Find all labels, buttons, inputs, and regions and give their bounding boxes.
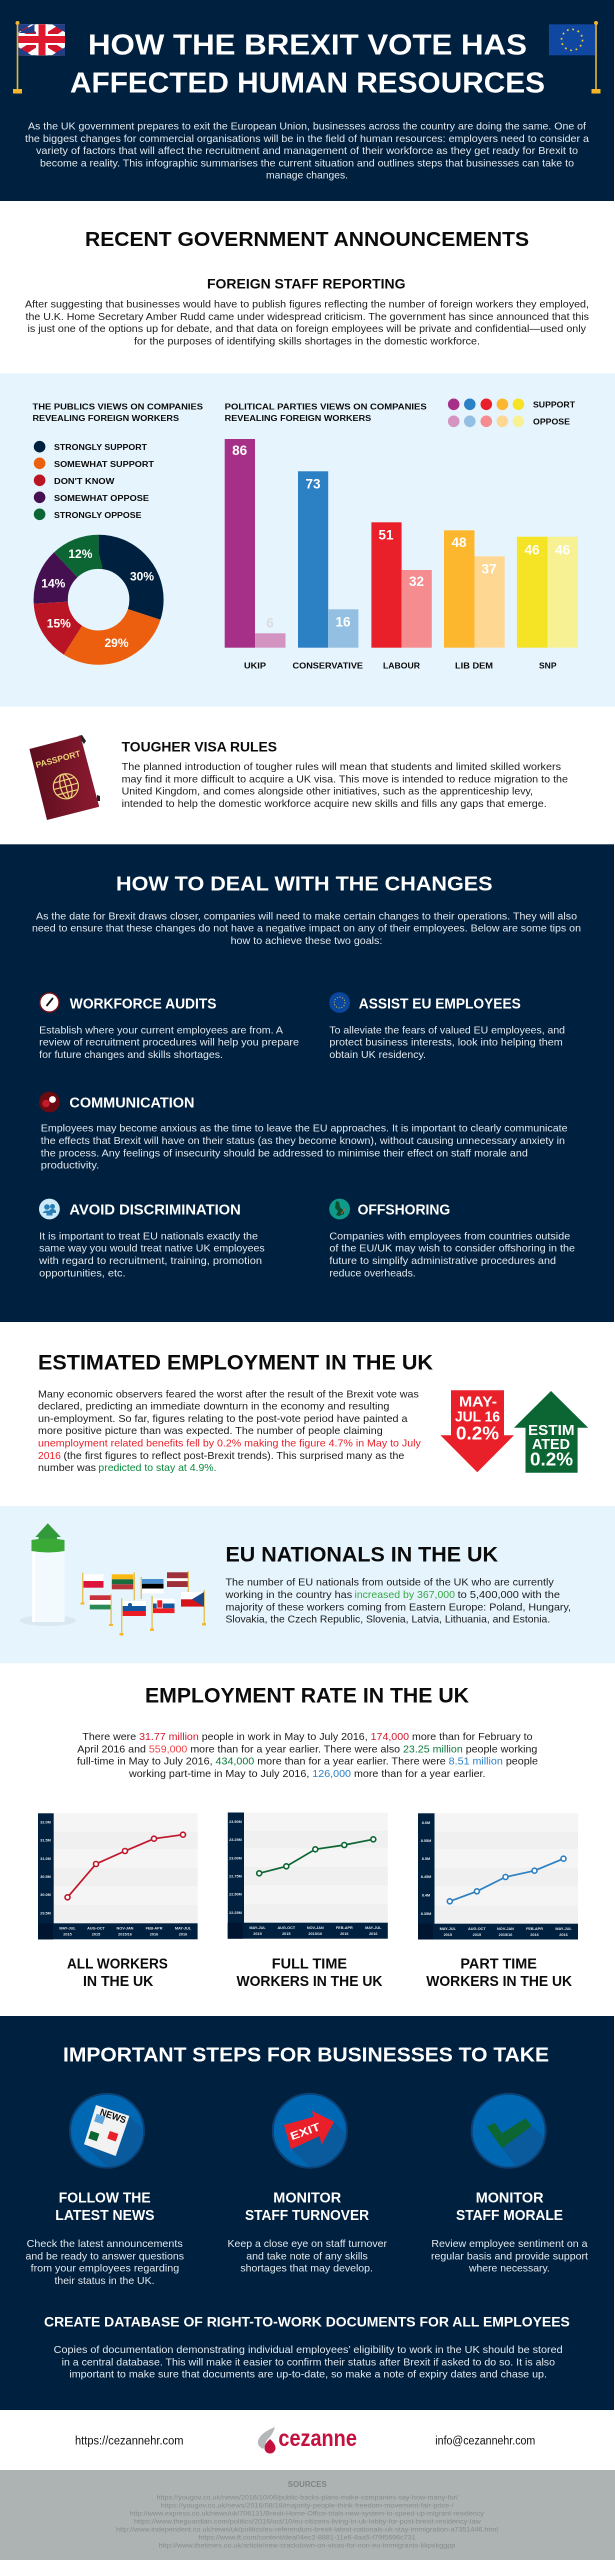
icon: green up arrow: 0.2% [530, 1449, 573, 1469]
caption: all workers [67, 1956, 168, 1990]
caption: full time workers [236, 1956, 383, 1990]
icon: passport: PASSPORT [35, 748, 82, 770]
chart: all workers: 30.0M [40, 1893, 51, 1897]
chart: political parties bars: 73 [305, 477, 321, 492]
chart: part time workers: MAY-JUL [440, 1927, 457, 1931]
heading: tougher visa rules: TOUGHER VISA RULES [122, 739, 277, 755]
text: source list: https://yougov.co.uk/news/2016/10/06/public-backs-plans-make-companies-say-how-many-for/ [156, 2495, 458, 2502]
tip: avoid discrimination: AVOID DISCRIMINATION [69, 1202, 241, 1218]
intro text [32, 910, 581, 947]
legend: public views: STRONGLY SUPPORT [54, 443, 147, 452]
heading: employment rate: EMPLOYMENT RATE IN THE UK [145, 1684, 469, 1707]
chart: all workers [38, 1813, 198, 1939]
chart: full time workers: 2016 [369, 1932, 378, 1936]
chart: full time workers: 22.25M [229, 1911, 242, 1915]
text: foreign staff reporting: for the purposes of identifying skills shortages in the domestic workforce. [134, 336, 480, 348]
heading: political parties views: POLITICAL PARTIES VIEWS ON COMPANIES [225, 402, 427, 411]
icon: red down arrow [440, 1390, 514, 1472]
text: employment rate: There were 31.77 million people in work in May to July 2016, 174,000 more than for February to [82, 1731, 533, 1743]
legend: public views: STRONGLY OPPOSE [54, 511, 142, 520]
tip: avoid discrimination: opportunities, etc. [39, 1267, 126, 1279]
heading: political parties views [225, 402, 427, 423]
text: source list: https://www.theguardian.com/politics/2016/oct/10/eu-citizens-living-in-uk-lobby-for-post-brexit-residency-law [134, 2519, 481, 2526]
chart: part time workers: MAY-JUL [555, 1927, 572, 1931]
chart: political parties bars: 6 [266, 616, 274, 631]
chart: all workers: 29.5M [40, 1912, 51, 1916]
footer: email: info@cezannehr.com [435, 2435, 535, 2447]
chart: part time workers: AUG-OCT [468, 1927, 486, 1931]
icon: newspaper: NEWS [98, 2107, 127, 2126]
chart: all workers: 32.0M [40, 1820, 51, 1824]
chart: public views donut: 15% [47, 616, 71, 630]
title: AFFECTED HUMAN RESOURCES [70, 68, 545, 100]
chart: full time workers: AUG-OCT [277, 1926, 296, 1930]
chart: all workers: AUG-OCT [87, 1926, 106, 1930]
chart: full time workers: MAY-JUL [365, 1926, 382, 1930]
tip: offshoring: future to simplify administrative procedures and [329, 1255, 556, 1267]
intro text: As the date for Brexit draws closer, companies will need to make certain changes to their operations. They will also [36, 910, 577, 922]
tip: communication: the effects that Brexit will have on their status (as they become known), without causing unnecessary anxiety in [41, 1135, 565, 1147]
chart: political parties bars: LABOUR [383, 660, 420, 670]
text: source list: http://www.independent.co.uk/news/uk/politics/eu-referendum-brexit-latest-nationals-uk-stay-immigration-a7351446.html [116, 2527, 498, 2534]
text: tougher visa rules [122, 761, 568, 810]
chart: political parties bars: 48 [451, 535, 467, 550]
chart: part time workers: 8.5M [422, 1857, 430, 1861]
tip: offshoring: of the EU/UK may wish to consider offshoring in the [329, 1243, 575, 1255]
chart: full time workers: 2015 [282, 1932, 291, 1936]
tip: offshoring: Companies with employees from countries outside [329, 1230, 570, 1242]
chart: political parties bars: UKIP [244, 660, 266, 670]
icon: UK flag [13, 21, 65, 94]
chart: all workers: 31.5M [40, 1838, 51, 1842]
text: tougher visa rules: United Kingdom, and comes alongside other initiatives, such as the apprenticeship levy, [122, 786, 533, 798]
icon: EU flag [549, 21, 600, 94]
step: follow the latest news: FOLLOW THE [59, 2191, 151, 2207]
chart: all workers: FEB-APR [146, 1926, 163, 1930]
tip: avoid discrimination: same way you would treat native UK employees [39, 1243, 265, 1255]
icon: exit sign [273, 2094, 347, 2168]
chart: part time workers: 2016 [559, 1933, 568, 1937]
text: EU nationals: increased by 367,000 [354, 1589, 455, 1601]
intro text: manage changes. [266, 170, 348, 182]
step: follow the latest news: from your employees regarding [31, 2263, 179, 2275]
legend: support and oppose: OPPOSE [533, 416, 570, 426]
step: monitor staff turnover [228, 2191, 388, 2275]
legend: support and oppose: SUPPORT [533, 400, 576, 410]
icon: red down arrow: JUL 16 [455, 1409, 500, 1426]
text: estimated employment: more positive picture than was expected. The number of people claiming [38, 1425, 383, 1437]
logo: cezanne [258, 2425, 357, 2454]
chart: political parties bars: 37 [481, 562, 497, 577]
chart: full time workers: 23.50M [229, 1820, 242, 1824]
title: HOW THE BREXIT VOTE HAS [88, 29, 527, 61]
chart: all workers: 2015/16 [118, 1932, 132, 1936]
panel: header [0, 0, 614, 201]
tip: offshoring [329, 1199, 575, 1279]
chart: all workers: MAY-JUL [59, 1926, 76, 1930]
chart: public views donut: 12% [68, 547, 93, 561]
tip: avoid discrimination: It is important to treat EU nationals exactly the [39, 1230, 258, 1242]
icon: passport [29, 735, 100, 820]
chart: full time workers: 22.75M [229, 1874, 242, 1878]
panel: how to deal with the changes [0, 844, 614, 1322]
heading: EU nationals: EU NATIONALS IN THE UK [226, 1544, 498, 1567]
text: source list: http://www.express.co.uk/news/uk/706131/Brexit-Home-Office-trials-new-system-to-speed-up-migrant-residency [130, 2511, 485, 2518]
intro text [25, 120, 589, 182]
chart: full time workers [228, 1812, 388, 1939]
chart: part time workers: 8.35M [421, 1912, 431, 1916]
text: estimated employment: predicted to stay at 4.9%. [98, 1462, 216, 1474]
chart: part time workers: 2015/16 [499, 1933, 512, 1937]
tip: communication: productivity. [41, 1160, 99, 1172]
logo: cezanne: cezanne [278, 2425, 357, 2451]
chart: political parties bars: CONSERVATIVE [292, 660, 363, 670]
chart: public views donut: 14% [41, 576, 66, 590]
text: employment rate [77, 1731, 538, 1780]
text: EU nationals [224, 1577, 571, 1626]
text: foreign staff reporting: is just one of the options up for debate, and that data on foreign employees will be private and confidential—used only [28, 323, 587, 335]
intro text: the biggest changes for commercial organisations will be in the field of human resources: employers need to consider a [25, 133, 589, 145]
step: monitor staff morale: regular basis and provide support [431, 2250, 588, 2262]
caption: all workers: IN THE UK [83, 1973, 153, 1990]
heading: public views: THE PUBLICS VIEWS ON COMPANIES [32, 402, 204, 411]
heading: estimated employment: ESTIMATED EMPLOYMENT IN THE UK [38, 1351, 433, 1374]
step: monitor staff morale: where necessary. [468, 2263, 550, 2275]
tip: offshoring: reduce overheads. [329, 1267, 416, 1279]
step: follow the latest news [26, 2191, 184, 2287]
chart: part time workers: 8.6M [422, 1821, 430, 1825]
legend: public views: SOMEWHAT OPPOSE [54, 494, 150, 503]
intro text: become a reality. This infographic summarises the current situation and outlines steps that businesses can take to [40, 157, 574, 169]
chart: all workers: MAY-JUL [175, 1926, 192, 1930]
step: monitor staff turnover: shortages that may develop. [240, 2263, 373, 2275]
text: foreign staff reporting [25, 299, 589, 348]
text: EU nationals: to 5,400,000 with the [458, 1589, 560, 1601]
text: EU nationals: majority of these workers coming from Eastern Europe: Poland, Hungary, [226, 1601, 571, 1613]
chart: political parties bars: SNP [539, 660, 557, 670]
step: follow the latest news: and be ready to answer questions [26, 2250, 184, 2262]
chart: full time workers: 22.50M [229, 1892, 242, 1896]
text: source list: https://www.ft.com/content/dea04ec2-8881-11e6-8aa5-f79f5696c731 [198, 2534, 416, 2542]
tip: assist EU employees: ASSIST EU EMPLOYEES [359, 996, 521, 1012]
text: estimated employment [38, 1388, 422, 1474]
chart: political parties bars: 46 [524, 543, 540, 558]
text: EU nationals: working in the country has [224, 1589, 352, 1601]
chart: part time workers: 8.55M [421, 1839, 431, 1843]
chart: all workers: 2016 [179, 1932, 187, 1936]
step: follow the latest news: Check the latest announcements [27, 2238, 183, 2250]
tip: workforce audits: WORKFORCE AUDITS [70, 996, 217, 1012]
chart: political parties bars [225, 439, 578, 670]
heading: public views: REVEALING FOREIGN WORKERS [32, 414, 180, 423]
chart: all workers: 2015 [63, 1932, 72, 1936]
panel: sources [0, 2470, 615, 2560]
chart: political parties bars: 51 [378, 528, 394, 543]
heading: public views [32, 402, 204, 423]
step: monitor staff turnover: STAFF TURNOVER [245, 2208, 369, 2224]
text: create database: important to make sure that documents are up-to-date, so make a note of expiry dates and chase up. [69, 2369, 547, 2381]
text: tougher visa rules: The planned introduction of tougher rules will mean that students and limited skilled workers [122, 761, 561, 773]
chart: all workers: 2015 [92, 1932, 100, 1936]
caption: part time workers: PART TIME [460, 1956, 537, 1973]
intro text: how to achieve these two goals: [231, 935, 382, 947]
panel: important steps [0, 2016, 614, 2410]
caption: full time workers: FULL TIME [272, 1956, 347, 1973]
legend: public views: DON'T KNOW [54, 477, 115, 486]
tip: communication: Employees may become anxious as the time to leave the EU approaches. It is important to clearly communicate [41, 1123, 568, 1135]
chart: part time workers: 2015 [444, 1933, 452, 1937]
icon: green up arrow [514, 1391, 588, 1473]
chart: full time workers: 2015 [253, 1932, 262, 1936]
tip: assist EU employees: protect business interests, look into helping them [329, 1037, 563, 1049]
text: estimated employment: unemployment related benefits fell by 0.2% making the figure 4.7% in May to July [38, 1438, 422, 1450]
text: create database: in a central database. This will make it easier to confirm their status after Brexit if asked to do so. It is also [62, 2356, 555, 2368]
heading: important steps: IMPORTANT STEPS FOR BUSINESSES TO TAKE [63, 2045, 549, 2067]
text: employment rate: April 2016 and 559,000 more than for a year earlier. There were also 23.25 million people working [77, 1743, 537, 1755]
icon: red down arrow: 0.2% [456, 1423, 499, 1443]
text: estimated employment: Many economic observers feared the worst after the result of the Brexit vote was [38, 1388, 419, 1400]
chart: part time workers: NOV-JAN [497, 1927, 514, 1931]
step: monitor staff turnover: and take note of any skills [246, 2250, 368, 2262]
icon: eastern european flags [80, 1571, 206, 1636]
caption: part time workers [426, 1956, 572, 1990]
text: tougher visa rules: may find it more difficult to acquire a UK visa. This move is intended to reduce migration to the [122, 773, 568, 785]
step: monitor staff morale [431, 2191, 588, 2275]
intro text: variety of factors that will affect the recruitment and management of their workforce as they get ready for Brexit to [36, 145, 578, 157]
text: source list [116, 2495, 498, 2550]
tip: communication: the process. Any feelings of insecurity should be addressed to minimise their effect on staff morale and [41, 1147, 528, 1159]
chart: political parties bars: LIB DEM [455, 660, 493, 670]
heading: foreign staff reporting: FOREIGN STAFF REPORTING [207, 276, 406, 292]
caption: full time workers: WORKERS IN THE UK [236, 1973, 383, 1990]
text: employment rate: full-time in May to July 2016, 434,000 more than for a year earlier. There were 8.51 million people [77, 1756, 538, 1768]
chart: part time workers: 2015 [473, 1933, 481, 1937]
chart: part time workers: 8.4M [422, 1894, 430, 1898]
legend: support and oppose [448, 398, 576, 427]
text: create database: Copies of documentation demonstrating individual employees’ eligibility to work in the UK should be stored [54, 2344, 563, 2356]
tip: avoid discrimination: with regard to recruitment, training, promotion [38, 1255, 262, 1267]
icon: exit sign: EXIT [289, 2121, 322, 2143]
step: monitor staff morale: STAFF MORALE [456, 2208, 563, 2224]
chart: full time workers: FEB-APR [336, 1926, 353, 1930]
chart: all workers: 31.0M [40, 1857, 51, 1861]
legend: public views: SOMEWHAT SUPPORT [54, 460, 154, 469]
icon: green up arrow: ESTIM [528, 1422, 574, 1439]
chart: full time workers: NOV-JAN [307, 1926, 324, 1930]
chart: public views donut: 29% [104, 636, 129, 650]
step: monitor staff turnover: Keep a close eye on staff turnover [228, 2238, 388, 2250]
chart: part time workers [418, 1813, 578, 1940]
legend: public views [34, 441, 154, 520]
intro text: As the UK government prepares to exit the European Union, businesses across the country are doing the same. One of [28, 120, 586, 132]
chart: part time workers: 8.45M [421, 1875, 431, 1879]
step: monitor staff morale: Review employee sentiment on a [431, 2238, 588, 2250]
text: tougher visa rules: intended to help the domestic workforce acquire new skills and fills any gaps that emerge. [122, 798, 547, 810]
footer: website: https://cezannehr.com [75, 2435, 184, 2447]
chart: part time workers: FEB-APR [526, 1927, 543, 1931]
chart: political parties bars: 86 [232, 443, 248, 458]
text: create database [54, 2344, 563, 2381]
heading: recent government announcements: RECENT GOVERNMENT ANNOUNCEMENTS [85, 229, 529, 251]
text: employment rate: working part-time in May to July 2016, 126,000 more than for a year earlier. [128, 1768, 485, 1780]
chart: full time workers: MAY-JUL [249, 1926, 266, 1930]
heading: sources: SOURCES [288, 2480, 327, 2489]
step: monitor staff turnover: MONITOR [273, 2191, 342, 2207]
tip: communication [39, 1092, 568, 1172]
chart: all workers: NOV-JAN [117, 1926, 134, 1930]
chart: full time workers: 23.25M [229, 1838, 242, 1842]
icon: red down arrow: MAY- [459, 1394, 497, 1411]
chart: political parties bars: 16 [335, 614, 351, 629]
intro text: need to ensure that these changes do not have a negative impact on any of their employees. Below are some tips on [32, 923, 581, 935]
text: EU nationals: The number of EU nationals from outside of the UK who are currently [226, 1577, 554, 1589]
chart: full time workers: 2016 [340, 1932, 349, 1936]
text: estimated employment: declared, predicting an immediate downturn in the economy and resulting [38, 1401, 390, 1413]
panel: EU nationals [0, 1506, 615, 1663]
step: follow the latest news: their status in the UK. [54, 2275, 154, 2287]
tip: assist EU employees [329, 992, 565, 1061]
chart: all workers: 30.5M [40, 1875, 51, 1879]
text: estimated employment: (the first figures to reflect post-Brexit trends). This surprised many as the [64, 1450, 404, 1462]
text: foreign staff reporting: After suggesting that businesses would have to publish figures reflecting the number of foreign workers they employed, [25, 299, 589, 311]
tip: communication: COMMUNICATION [69, 1095, 194, 1111]
step: monitor staff morale: MONITOR [476, 2191, 544, 2207]
tip: offshoring: OFFSHORING [358, 1202, 450, 1218]
caption: part time workers: WORKERS IN THE UK [426, 1973, 572, 1990]
heading: political parties views: REVEALING FOREIGN WORKERS [225, 414, 372, 423]
tip: workforce audits [39, 993, 299, 1061]
tip: workforce audits: Establish where your current employees are from. A [39, 1024, 283, 1036]
chart: public views donut [41, 547, 154, 650]
text: estimated employment: un-employment. So far, figures relating to the post-vote period have painted a [38, 1413, 408, 1425]
panel: survey charts [0, 373, 615, 707]
icon: bottle [20, 1523, 76, 1626]
chart: full time workers: 23.00M [229, 1856, 242, 1860]
chart: all workers: 2016 [150, 1932, 158, 1936]
icon: check mark [472, 2094, 546, 2168]
chart: political parties bars: 32 [409, 574, 424, 589]
step: follow the latest news: LATEST NEWS [55, 2208, 155, 2224]
icon: green up arrow: ATED [532, 1436, 570, 1453]
tip: assist EU employees: obtain UK residency. [329, 1049, 426, 1061]
tip: avoid discrimination [38, 1199, 265, 1279]
text: EU nationals: Slovakia, the Czech Republic, Slovenia, Latvia, Lithuania, and Estonia. [226, 1614, 550, 1626]
tip: workforce audits: review of recruitment procedures will help you prepare [39, 1037, 299, 1049]
text: foreign staff reporting: the U.K. Home Secretary Amber Rudd came under widespread criticism. The government has since announced that this [26, 311, 589, 323]
icon: newspaper [70, 2094, 144, 2168]
text: source list: https://yougov.co.uk/news/2016/08/18/majority-people-think-freedom-movement-fair-price-/ [161, 2503, 454, 2510]
title [70, 29, 545, 100]
tip: assist EU employees: To alleviate the fears of valued EU employees, and [329, 1024, 565, 1036]
chart: full time workers: 2015/16 [308, 1932, 322, 1936]
tip: workforce audits: for future changes and skills shortages. [39, 1049, 223, 1061]
caption: all workers: ALL WORKERS [67, 1956, 168, 1973]
text: source list: http://www.thetimes.co.uk/article/new-crackdown-on-visas-for-non-eu-immigrants-kkpxkggpp [159, 2542, 456, 2550]
chart: part time workers: 2016 [530, 1933, 539, 1937]
heading: create database: CREATE DATABASE OF RIGHT-TO-WORK DOCUMENTS FOR ALL EMPLOYEES [44, 2314, 570, 2330]
chart: political parties bars: 46 [555, 543, 571, 558]
chart: public views donut: 30% [130, 570, 154, 584]
text: estimated employment: number was [38, 1462, 96, 1474]
text: estimated employment: 2016 [38, 1450, 61, 1462]
heading: HOW TO DEAL WITH THE CHANGES [116, 874, 492, 896]
